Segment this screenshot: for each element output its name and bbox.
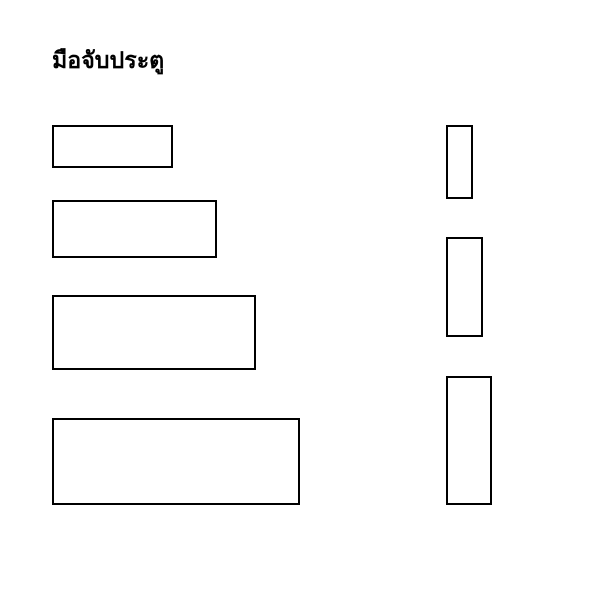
vertical box 2 — [447, 238, 482, 336]
vertical box 3 — [447, 377, 491, 504]
right column boxes — [447, 126, 491, 504]
title: มือจับประตู — [52, 47, 164, 73]
left column boxes — [53, 126, 299, 504]
horizontal box 3 — [53, 296, 255, 369]
horizontal box 2 — [53, 201, 216, 257]
vertical box 1 — [447, 126, 472, 198]
horizontal box 1 — [53, 126, 172, 167]
horizontal box 4 — [53, 419, 299, 504]
